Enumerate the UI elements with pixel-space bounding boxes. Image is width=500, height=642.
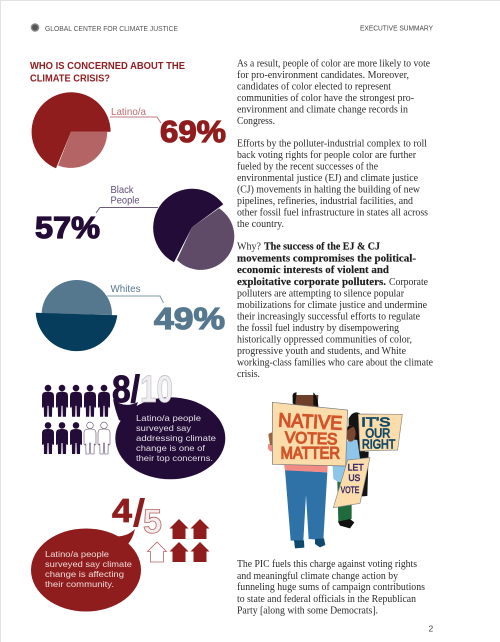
text: paragraph 4: and meaningful climate change action by — [237, 571, 399, 582]
chart: Whites 49% — [36, 280, 225, 351]
chart: Black People 57% — [35, 184, 234, 270]
text: paragraph 2: Efforts by the polluter-industrial complex to roll — [237, 138, 427, 150]
icon: houses 4 of 5 — [148, 519, 210, 562]
sign: LET US VOTE: US — [348, 473, 360, 483]
header — [31, 23, 433, 33]
text: paragraph 2 — [237, 138, 428, 230]
text: paragraph 3: polluters are attempting to silence popular — [237, 288, 404, 300]
sign: LET US VOTE — [333, 458, 370, 508]
text: paragraph 2: back voting rights for people color are further — [237, 150, 416, 161]
callout: 8/10: Latino/a people — [136, 413, 201, 423]
chart: Whites 49%: 49% — [154, 302, 225, 336]
text: paragraph 2: pipelines, refineries, industrial facilities, and — [237, 196, 414, 207]
chart: Black People 57%: 57% — [35, 211, 100, 245]
illustration: protesters with signs — [268, 392, 402, 548]
heading — [30, 61, 185, 84]
sign: NATIVE VOTES MATTER: MATTER — [281, 444, 340, 463]
header right: EXECUTIVE SUMMARY — [360, 23, 433, 32]
callout: 4/5: change is affecting — [45, 569, 124, 579]
pictogram: 8 of 10 people — [42, 385, 110, 454]
text: paragraph 2: the country. — [237, 219, 284, 230]
text: paragraph 1 — [237, 58, 430, 127]
text: paragraph 1: for pro-environment candidates. Moreover, — [237, 70, 409, 81]
chart: Latino/a 69%: Latino/a — [111, 106, 146, 118]
callout: 4/5: Latino/a people — [45, 549, 109, 559]
sign: IT'S OUR RIGHT: IT'S — [361, 416, 390, 430]
sign: NATIVE VOTES MATTER — [272, 402, 348, 466]
text: paragraph 1: communities of color have the strongest pro- — [237, 93, 414, 104]
callout: 4/5: surveyed say climate — [45, 559, 132, 569]
text: paragraph 3: historically oppressed communities of color, — [237, 334, 412, 345]
sign: NATIVE VOTES MATTER: NATIVE — [278, 410, 343, 435]
text: paragraph 1: environment and climate change records in — [237, 104, 409, 115]
person: adult in jeans — [268, 392, 328, 548]
text: paragraph 3: mobilizations for climate justice and undermine — [237, 300, 427, 311]
text: paragraph 3: economic interests of violent and — [237, 265, 389, 276]
header left: GLOBAL CENTER FOR CLIMATE JUSTICE — [45, 24, 178, 33]
heading: WHO IS CONCERNED ABOUT THE — [30, 61, 185, 72]
text: paragraph 3: Corporate — [389, 277, 428, 288]
text: paragraph 3: Why? — [237, 242, 261, 252]
person: back figure — [349, 412, 369, 497]
page number: 2 — [428, 624, 434, 634]
text: paragraph 2: fueled by the recent successes of the — [237, 162, 378, 172]
chart: Latino/a 69% — [32, 92, 226, 168]
sign: LET US VOTE: LET — [348, 462, 364, 472]
icon: logo — [31, 24, 39, 31]
text: paragraph 3: working-class families who care about the climate — [237, 358, 433, 368]
text: paragraph 3: the fossil fuel industry by disempowering — [237, 323, 400, 334]
text: paragraph 4: Party [along with some Democrats]. — [237, 606, 378, 616]
text: paragraph 3: exploitative corporate polluters. — [237, 277, 386, 288]
sign: NATIVE VOTES MATTER: VOTES — [285, 430, 338, 448]
text: paragraph 3: their increasingly successful efforts to regulate — [237, 312, 420, 322]
callout: 4/5: 4 — [112, 492, 133, 529]
callout: 4/5: their community. — [45, 579, 114, 589]
callout: 8/10 — [112, 369, 225, 479]
sign: LET US VOTE: VOTE — [341, 485, 359, 495]
chart: Latino/a 69%: 69% — [160, 115, 226, 149]
text: paragraph 2: (CJ) movements in halting the building of new — [237, 184, 420, 196]
text: paragraph 3: crisis. — [237, 369, 260, 380]
callout: 8/10: 8/ — [112, 369, 140, 411]
person: child in blue — [333, 425, 360, 528]
text: paragraph 2: other fossil fuel infrastructure in states all across — [237, 208, 428, 218]
sign: IT'S OUR RIGHT — [358, 414, 402, 452]
text: paragraph 4: to state and federal officials in the Republican — [237, 594, 417, 605]
sign: IT'S OUR RIGHT: RIGHT — [362, 438, 396, 452]
callout: 4/5: 5 — [143, 503, 162, 541]
callout: 8/10: 10 — [140, 369, 173, 411]
text: paragraph 4: funneling huge sums of campaign contributions — [237, 582, 425, 593]
text: paragraph 2: environmental justice (EJ) and climate justice — [237, 173, 418, 184]
callout: 8/10: surveyed say — [136, 423, 192, 433]
chart: Black People 57%: People — [110, 194, 140, 206]
text: paragraph 1: Congress. — [237, 116, 275, 127]
text: paragraph 1: As a result, people of color are more likely to vote — [237, 58, 430, 70]
callout: 8/10: addressing climate — [136, 433, 216, 443]
heading: CLIMATE CRISIS? — [30, 73, 110, 84]
text: paragraph 1: candidates of color elected to represent — [237, 81, 391, 92]
text: paragraph 3: The success of the EJ & CJ — [264, 242, 380, 252]
text: paragraph 3: progressive youth and students, and White — [237, 346, 406, 357]
text: paragraph 4 — [237, 559, 425, 616]
chart: Black People 57%: Black — [110, 184, 134, 196]
chart: Whites 49%: Whites — [110, 283, 140, 295]
sign: IT'S OUR RIGHT: OUR — [365, 426, 390, 440]
callout: 8/10: their top concerns. — [136, 453, 213, 463]
callout: 8/10: change is one of — [136, 443, 206, 453]
callout: 4/5 — [31, 492, 162, 612]
text: paragraph 3: movements compromises the political- — [237, 254, 416, 264]
text: paragraph 4: The PIC fuels this charge against voting rights — [237, 559, 417, 570]
text: paragraph 3 — [237, 242, 433, 380]
